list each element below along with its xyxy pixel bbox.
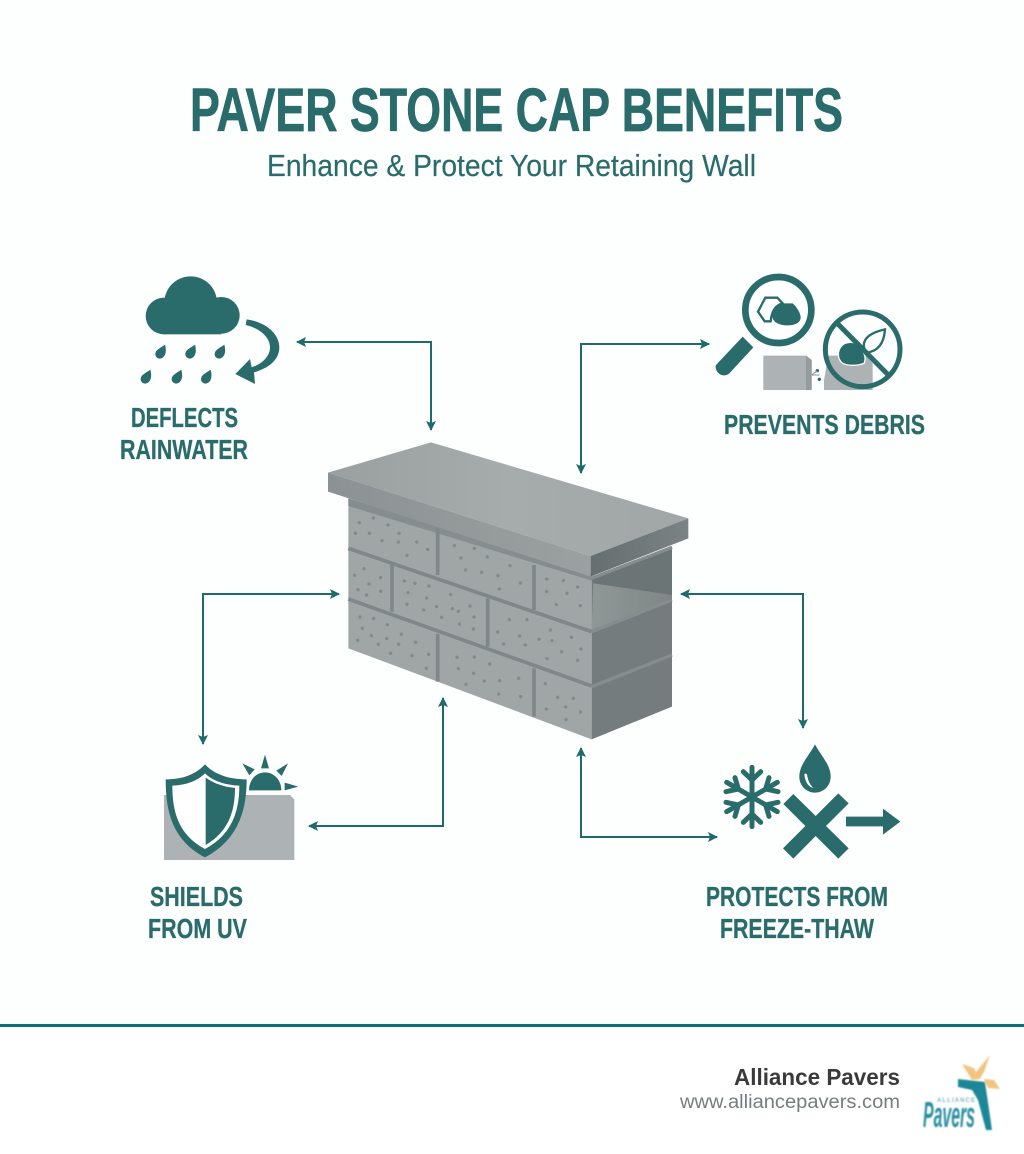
wall front face bbox=[348, 498, 592, 739]
cap front bbox=[328, 473, 591, 577]
cloud bbox=[146, 276, 240, 334]
illustration: brick wall with paver cap bbox=[328, 442, 688, 739]
footer website: www.alliancepavers.com bbox=[679, 1092, 900, 1113]
cap top bbox=[328, 442, 688, 556]
wall front shadow under cap bbox=[348, 498, 592, 581]
prohibition circle bbox=[825, 312, 900, 387]
logo: Alliance Pavers bbox=[923, 1055, 1000, 1135]
right face light wedge bbox=[592, 583, 672, 630]
label: shields from UV: FROM UV bbox=[148, 913, 247, 944]
sun rays bbox=[242, 755, 298, 790]
subtitle: Enhance & Protect Your Retaining Wall bbox=[267, 148, 756, 183]
wall right face bbox=[592, 547, 672, 739]
arrow: freeze-thaw to wall bbox=[581, 748, 717, 837]
label: prevents debris: PREVENTS DEBRIS bbox=[724, 409, 925, 440]
magnifier ring bbox=[745, 277, 811, 343]
footer company name: Alliance Pavers bbox=[734, 1064, 900, 1090]
water drop bbox=[799, 744, 831, 793]
label: deflects rainwater: DEFLECTS bbox=[131, 402, 238, 433]
arrow: shields from UV to wall bbox=[309, 698, 443, 826]
label: deflects rainwater: RAINWATER bbox=[120, 434, 248, 465]
snowflake bbox=[726, 767, 778, 827]
magnifier handle bbox=[716, 337, 753, 375]
curved arrow bbox=[235, 319, 279, 384]
connector arrows bbox=[203, 342, 803, 837]
arrow: wall to shields from UV bbox=[203, 594, 339, 744]
label: shields from UV: SHIELDS bbox=[150, 881, 243, 912]
block bbox=[164, 795, 294, 860]
icon: magnifier and blocked debris bbox=[716, 277, 900, 390]
leaf bbox=[864, 329, 885, 353]
arrow: wall to freeze-thaw bbox=[681, 594, 803, 728]
logo state shape bbox=[958, 1079, 992, 1130]
icon: rain cloud with deflection arrow bbox=[141, 276, 279, 384]
arrow: prevents debris to wall bbox=[581, 344, 709, 473]
stone under prohibition bbox=[838, 342, 865, 365]
cap side bbox=[591, 518, 688, 577]
arrow right bbox=[846, 809, 900, 835]
brick speckles bbox=[355, 518, 581, 720]
sun bbox=[249, 772, 281, 790]
footer background bbox=[0, 1027, 1024, 1154]
right face ledges bbox=[592, 547, 672, 687]
icon: snowflake, drop, cross and arrow bbox=[726, 744, 900, 859]
icon: shield and sun bbox=[164, 755, 298, 860]
label: shields from UV bbox=[148, 881, 247, 944]
prohibition slash bbox=[837, 323, 888, 375]
stones in lens bbox=[758, 298, 783, 321]
blocks bbox=[763, 356, 812, 390]
right face dark wedge bbox=[592, 547, 672, 595]
label: deflects rainwater bbox=[120, 402, 248, 465]
label: protects from freeze-thaw: PROTECTS FROM bbox=[706, 881, 888, 912]
raindrops bbox=[141, 345, 225, 384]
logo: Alliance Pavers: ALLIANCE bbox=[937, 1098, 975, 1104]
debris specks bbox=[812, 369, 821, 381]
footer rule bbox=[0, 1024, 1024, 1027]
label: protects from freeze-thaw bbox=[706, 881, 888, 944]
arrow: deflects rainwater to wall bbox=[297, 342, 431, 430]
wall mortar joints bbox=[348, 528, 592, 717]
logo palm fronds bbox=[962, 1055, 1000, 1089]
cross bbox=[783, 793, 849, 859]
shield bbox=[166, 764, 247, 857]
label: protects from freeze-thaw: FREEZE-THAW bbox=[720, 913, 874, 944]
